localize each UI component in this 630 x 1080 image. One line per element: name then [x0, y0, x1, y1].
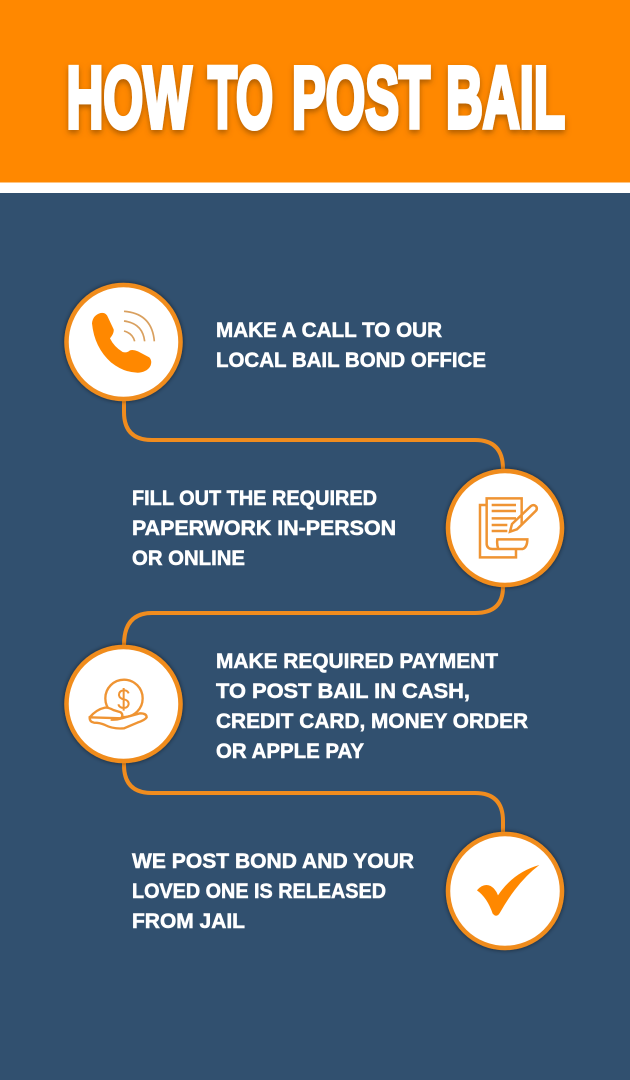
step 4 text: LOVED ONE IS RELEASED: [132, 880, 386, 903]
icon: document and pen: [480, 498, 537, 557]
step 4 text: [132, 850, 414, 933]
icon: hand holding coin: [90, 680, 147, 729]
title: HOW: [66, 48, 192, 146]
step 3 text: OR APPLE PAY: [216, 740, 364, 763]
step 1 circle: [66, 285, 180, 399]
step 2 circle: [448, 471, 562, 585]
step 3 text: TO POST BAIL IN CASH,: [216, 680, 470, 703]
icon: phone: [92, 311, 154, 373]
step 4 text: WE POST BOND AND YOUR: [132, 850, 414, 873]
title: [66, 48, 565, 146]
connector path between steps: [124, 400, 503, 832]
step 1 text: MAKE A CALL TO OUR: [216, 319, 442, 342]
step 2 text: OR ONLINE: [132, 547, 245, 570]
step 3 text: CREDIT CARD, MONEY ORDER: [216, 710, 528, 733]
step 2 text: [132, 487, 396, 570]
header band: [0, 0, 630, 182]
step 4 circle: [448, 834, 562, 948]
title: POST: [292, 48, 430, 146]
icon: check mark: [477, 865, 539, 916]
step 1: call: [66, 285, 486, 399]
step 3 text: [216, 650, 528, 763]
step 3 text: MAKE REQUIRED PAYMENT: [216, 650, 498, 673]
title: TO: [208, 48, 273, 146]
step 3: payment: [66, 647, 528, 763]
step 2 text: FILL OUT THE REQUIRED: [132, 487, 377, 510]
step 3 circle: [66, 647, 180, 761]
step 2 text: PAPERWORK IN-PERSON: [132, 517, 396, 540]
step 1 text: [216, 319, 486, 372]
step 1 text: LOCAL BAIL BOND OFFICE: [216, 349, 486, 372]
step 4 text: FROM JAIL: [132, 910, 245, 933]
step 4: release: [132, 834, 562, 948]
step 2: paperwork: [132, 471, 562, 585]
